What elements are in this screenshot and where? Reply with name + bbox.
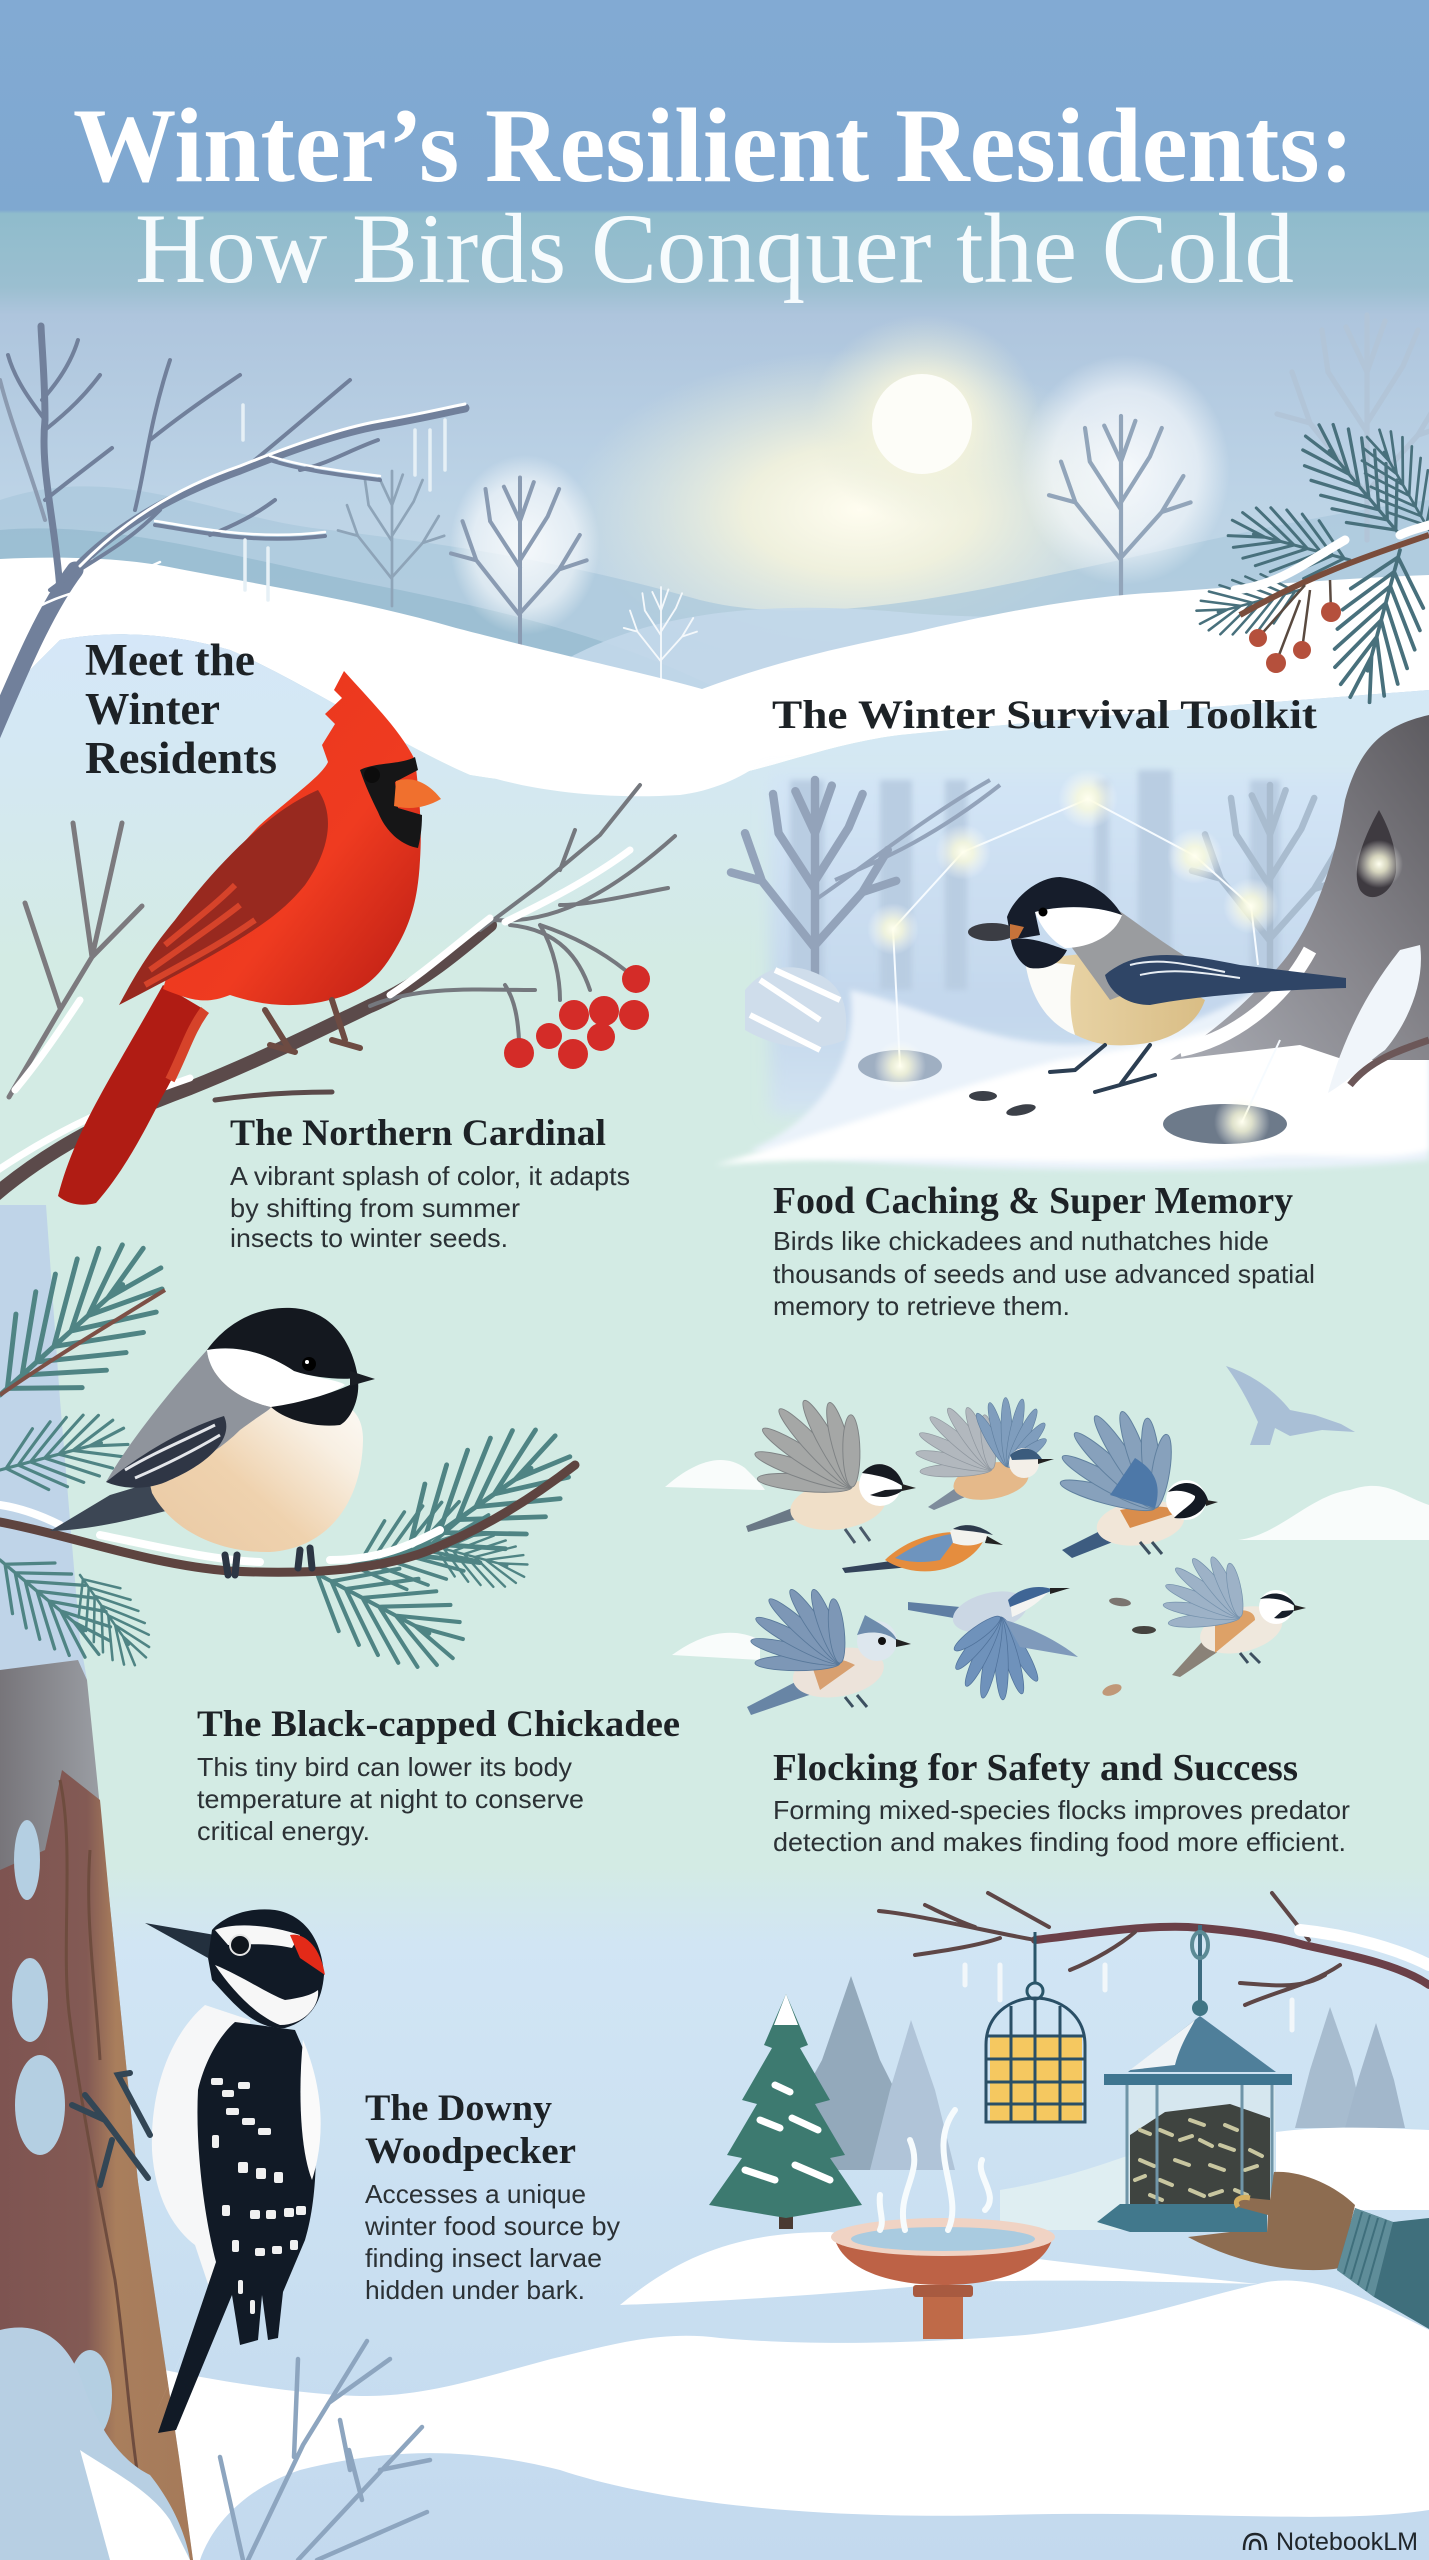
memory constellation xyxy=(867,769,1403,1150)
text: The Black-capped Chickadee xyxy=(197,1704,680,1846)
text: Flocking for Safety and Success: Flocking for Safety and Success xyxy=(773,1747,1298,1789)
snow hills xyxy=(0,558,1429,786)
text: Food Caching and Super Memory: memory to retrieve them. xyxy=(773,1291,1070,1321)
tree trunk with cache xyxy=(1170,715,1429,1093)
cardinal branch with berries xyxy=(0,785,675,1195)
foreground snow drift xyxy=(120,2280,1429,2560)
text: The Northern Cardinal: A vibrant splash of color, it adapts xyxy=(230,1161,630,1191)
snowy ground xyxy=(715,930,1429,1170)
text: The Black-capped Chickadee: This tiny bird can lower its body xyxy=(197,1752,572,1782)
heading: Meet the Winter Residents: Winter xyxy=(85,684,220,734)
heading: Meet the Winter Residents xyxy=(85,635,277,783)
text: The Northern Cardinal: by shifting from summer xyxy=(230,1193,520,1223)
clouds xyxy=(665,1460,1429,1660)
text: The Black-capped Chickadee: The Black-capped Chickadee xyxy=(197,1704,680,1745)
title: Winter’s Resilient Residents: xyxy=(73,87,1354,204)
chickadee with seed xyxy=(968,877,1346,1092)
icon: downy woodpecker xyxy=(72,1909,325,2433)
bird 6: flying nuthatch xyxy=(908,1584,1078,1719)
distant blue hills xyxy=(0,486,1429,720)
bird 1: chickadee xyxy=(746,1392,916,1543)
text: Food Caching and Super Memory: thousands of seeds and use advanced spatial xyxy=(773,1259,1315,1289)
text: The Black-capped Chickadee: temperature at night to conserve xyxy=(197,1784,584,1814)
text: The Northern Cardinal: insects to winter seeds. xyxy=(230,1223,508,1253)
text: The Northern Cardinal xyxy=(230,1113,630,1253)
pale upper trunk, left edge xyxy=(0,1205,87,1680)
sun and pale glow xyxy=(570,315,1150,670)
distant bare trees with halos xyxy=(338,315,1429,680)
text: The Downy Woodpecker xyxy=(364,2088,620,2305)
bird 7: chickadee xyxy=(1158,1551,1306,1677)
icon: heated bird bath xyxy=(831,2110,1055,2339)
heading: Meet the Winter Residents: Meet the xyxy=(85,635,255,685)
icon: seed feeder held by a hand xyxy=(1097,1925,1429,2329)
distant pine trees xyxy=(780,1976,1405,2170)
falling seeds xyxy=(1101,1597,1156,1698)
title: How Birds Conquer the Cold xyxy=(135,193,1294,304)
text: The Downy Woodpecker: hidden under bark. xyxy=(365,2275,585,2305)
snow drifts in helper scene xyxy=(620,2128,1429,2305)
title xyxy=(73,87,1354,304)
pine branches around chickadee xyxy=(0,1219,592,1687)
snow field background xyxy=(0,634,1429,2560)
text: The Downy Woodpecker: finding insect larvae xyxy=(365,2243,602,2273)
icon: northern cardinal xyxy=(58,671,441,1205)
bare twigs, bottom left xyxy=(220,2341,430,2560)
bird 4: nuthatch, perched pose xyxy=(842,1525,1003,1573)
text: The Black-capped Chickadee: critical energy. xyxy=(197,1816,370,1846)
text: The Northern Cardinal: The Northern Cardinal xyxy=(230,1113,606,1154)
hanging branch xyxy=(879,1893,1429,2030)
text: The Downy Woodpecker: Accesses a unique xyxy=(365,2179,586,2209)
illustration: chickadee caching food xyxy=(715,715,1429,1170)
forest backdrop xyxy=(731,770,1429,1115)
bare tree, top left xyxy=(0,326,465,740)
text: Flocking for Safety and Success: detection and makes finding food more efficient. xyxy=(773,1827,1346,1857)
text: Flocking for Safety and Success: Forming mixed-species flocks improves predator xyxy=(773,1795,1350,1825)
text: The Downy Woodpecker: Woodpecker xyxy=(365,2131,576,2172)
hawk silhouette xyxy=(1226,1366,1355,1445)
white snow drift behind headings xyxy=(470,745,780,796)
text: Food Caching and Super Memory: Birds like chickadees and nuthatches hide xyxy=(773,1226,1269,1256)
seed caches xyxy=(858,1050,1287,1144)
bird 3: tit xyxy=(1051,1394,1218,1558)
text: Food Caching and Super Memory xyxy=(773,1180,1315,1321)
icon: evergreen tree xyxy=(709,1994,862,2229)
background: winter sky xyxy=(0,0,1429,700)
icon: black-capped chickadee xyxy=(50,1308,375,1575)
text: Flocking for Safety and Success xyxy=(773,1747,1350,1857)
tree trunk, lower left xyxy=(0,1660,193,2560)
text: The Downy Woodpecker: winter food source by xyxy=(364,2211,620,2241)
text: Food Caching and Super Memory: Food Caching & Super Memory xyxy=(773,1180,1293,1222)
bird 5: titmouse xyxy=(747,1585,911,1715)
heading: Meet the Winter Residents: Residents xyxy=(85,733,277,783)
pine branch with berries, top right xyxy=(1191,408,1429,710)
heading: The Winter Survival Toolkit: The Winter Survival Toolkit xyxy=(772,692,1318,737)
flock of birds xyxy=(746,1366,1355,1719)
bird 2: nuthatch xyxy=(913,1381,1060,1510)
icon: suet cage feeder xyxy=(986,1932,1085,2122)
text: The Downy Woodpecker: The Downy xyxy=(365,2088,553,2129)
logo: NotebookLM: NotebookLM xyxy=(1276,2528,1418,2556)
